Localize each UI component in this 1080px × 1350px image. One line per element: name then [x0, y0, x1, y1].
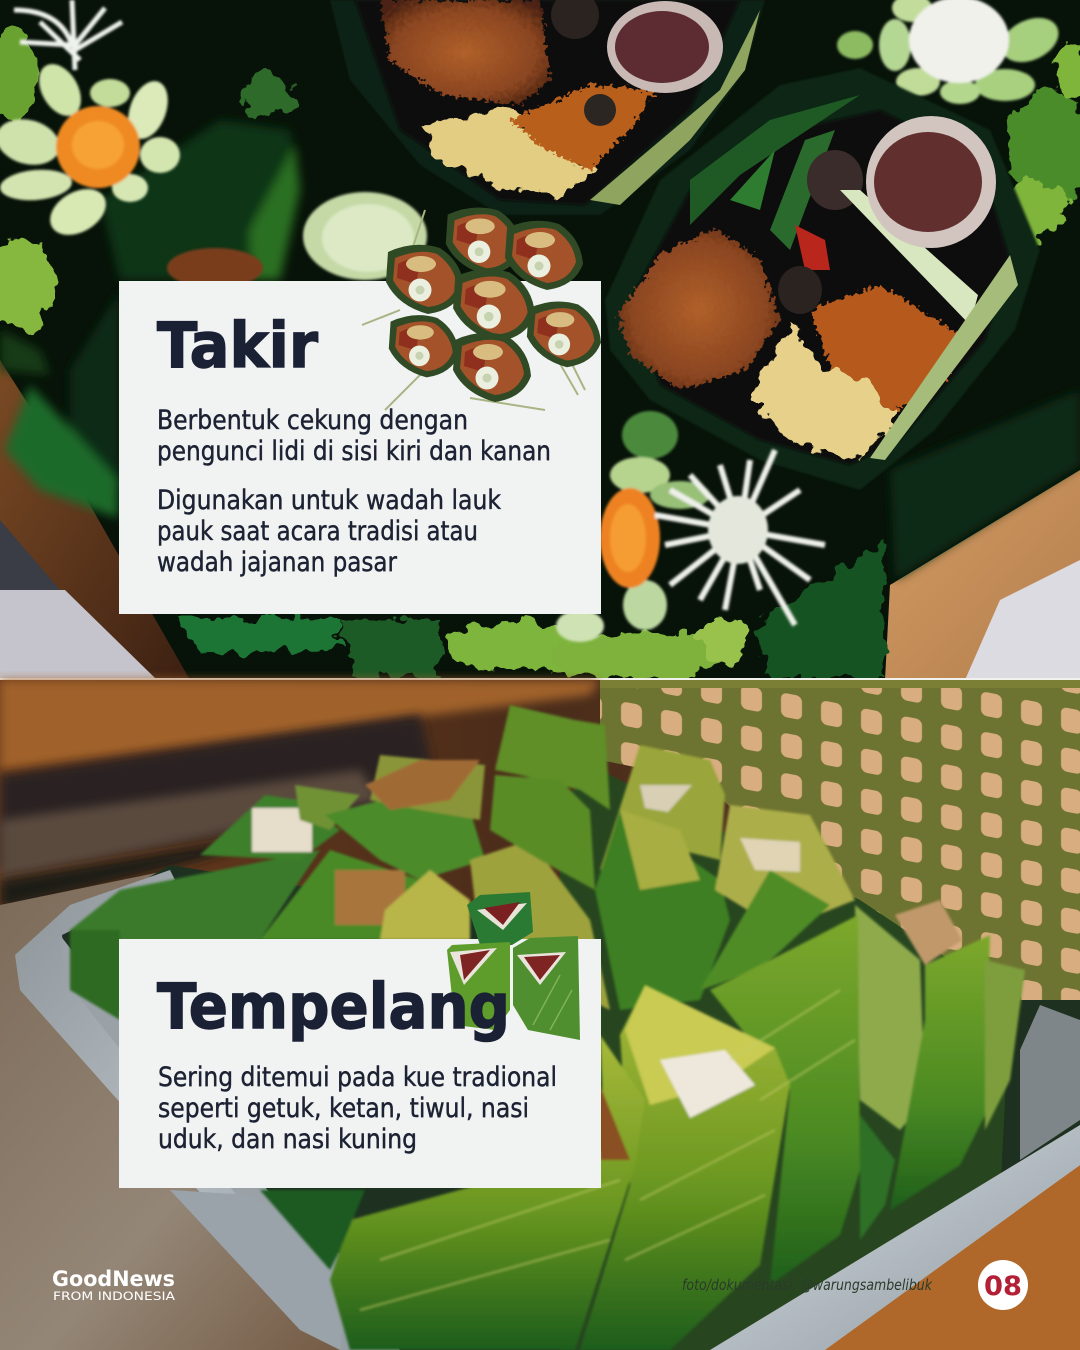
panel background: [119, 939, 601, 1188]
icon: cucumber carrot flower top left: [0, 0, 180, 244]
icon: perforated basket: [600, 680, 1080, 1015]
description: uduk, dan nasi kuning: [158, 1124, 417, 1155]
photo: tempelang cones on tray: [0, 680, 1080, 1350]
lettuce left and right: [0, 25, 1080, 331]
divider: [0, 678, 1080, 680]
wood table left: [0, 360, 190, 680]
logo: GoodNews from Indonesia: GoodNews: [52, 1267, 175, 1291]
bottom leaves: [178, 540, 885, 679]
panel: tempelang: [119, 892, 601, 1188]
description: use: pauk saat acara tradisi atau: [157, 516, 478, 547]
photo: takir food platter: [0, 0, 1080, 680]
logo: GoodNews from Indonesia: FROM INDONESIA: [53, 1289, 175, 1303]
bowl: top center takir: [330, 0, 765, 215]
leaf cones front rows: [260, 900, 1025, 1350]
description: use: wadah jajanan pasar: [157, 547, 397, 578]
panel: takir: [119, 207, 601, 614]
photo credit: foto/dokumentasi: @warungsambelibuk: [682, 1276, 933, 1294]
leaf cones back rows: [70, 705, 855, 1020]
description: [158, 1062, 557, 1155]
description: shape: pengunci lidi di sisi kiri dan kanan: [157, 436, 551, 467]
wood table bottom right: [820, 1165, 1080, 1350]
description: seperti getuk, ketan, tiwul, nasi: [158, 1093, 529, 1124]
logo: GoodNews from Indonesia: [52, 1267, 175, 1303]
cucumber slice center: [167, 192, 427, 288]
thumbnail: tempelang wraps: [447, 892, 580, 1040]
description: shape: [157, 405, 551, 467]
title: Tempelang: [157, 970, 510, 1043]
bowl: right takir with fried chicken: [605, 68, 1040, 490]
thumbnail: takir cluster: [362, 207, 601, 410]
description: shape: Berbentuk cekung dengan: [157, 405, 468, 436]
dark leaf wrapping: [0, 120, 1080, 580]
page number badge: [978, 1260, 1028, 1310]
background wood shelf: [0, 680, 1080, 920]
description: Sering ditemui pada kue tradional: [158, 1062, 557, 1093]
table: [0, 870, 420, 1350]
wood table right: [885, 470, 1080, 680]
description: use: Digunakan untuk wadah lauk: [157, 485, 502, 516]
description: use: [157, 485, 502, 578]
panel background: [119, 281, 601, 614]
page number badge: 08: [984, 1271, 1022, 1302]
title: Takir: [157, 309, 318, 382]
icon: cucumber flower top right: [837, 0, 1066, 104]
tray: [15, 770, 1080, 1350]
icon: radish flower and carrot: [556, 411, 825, 642]
